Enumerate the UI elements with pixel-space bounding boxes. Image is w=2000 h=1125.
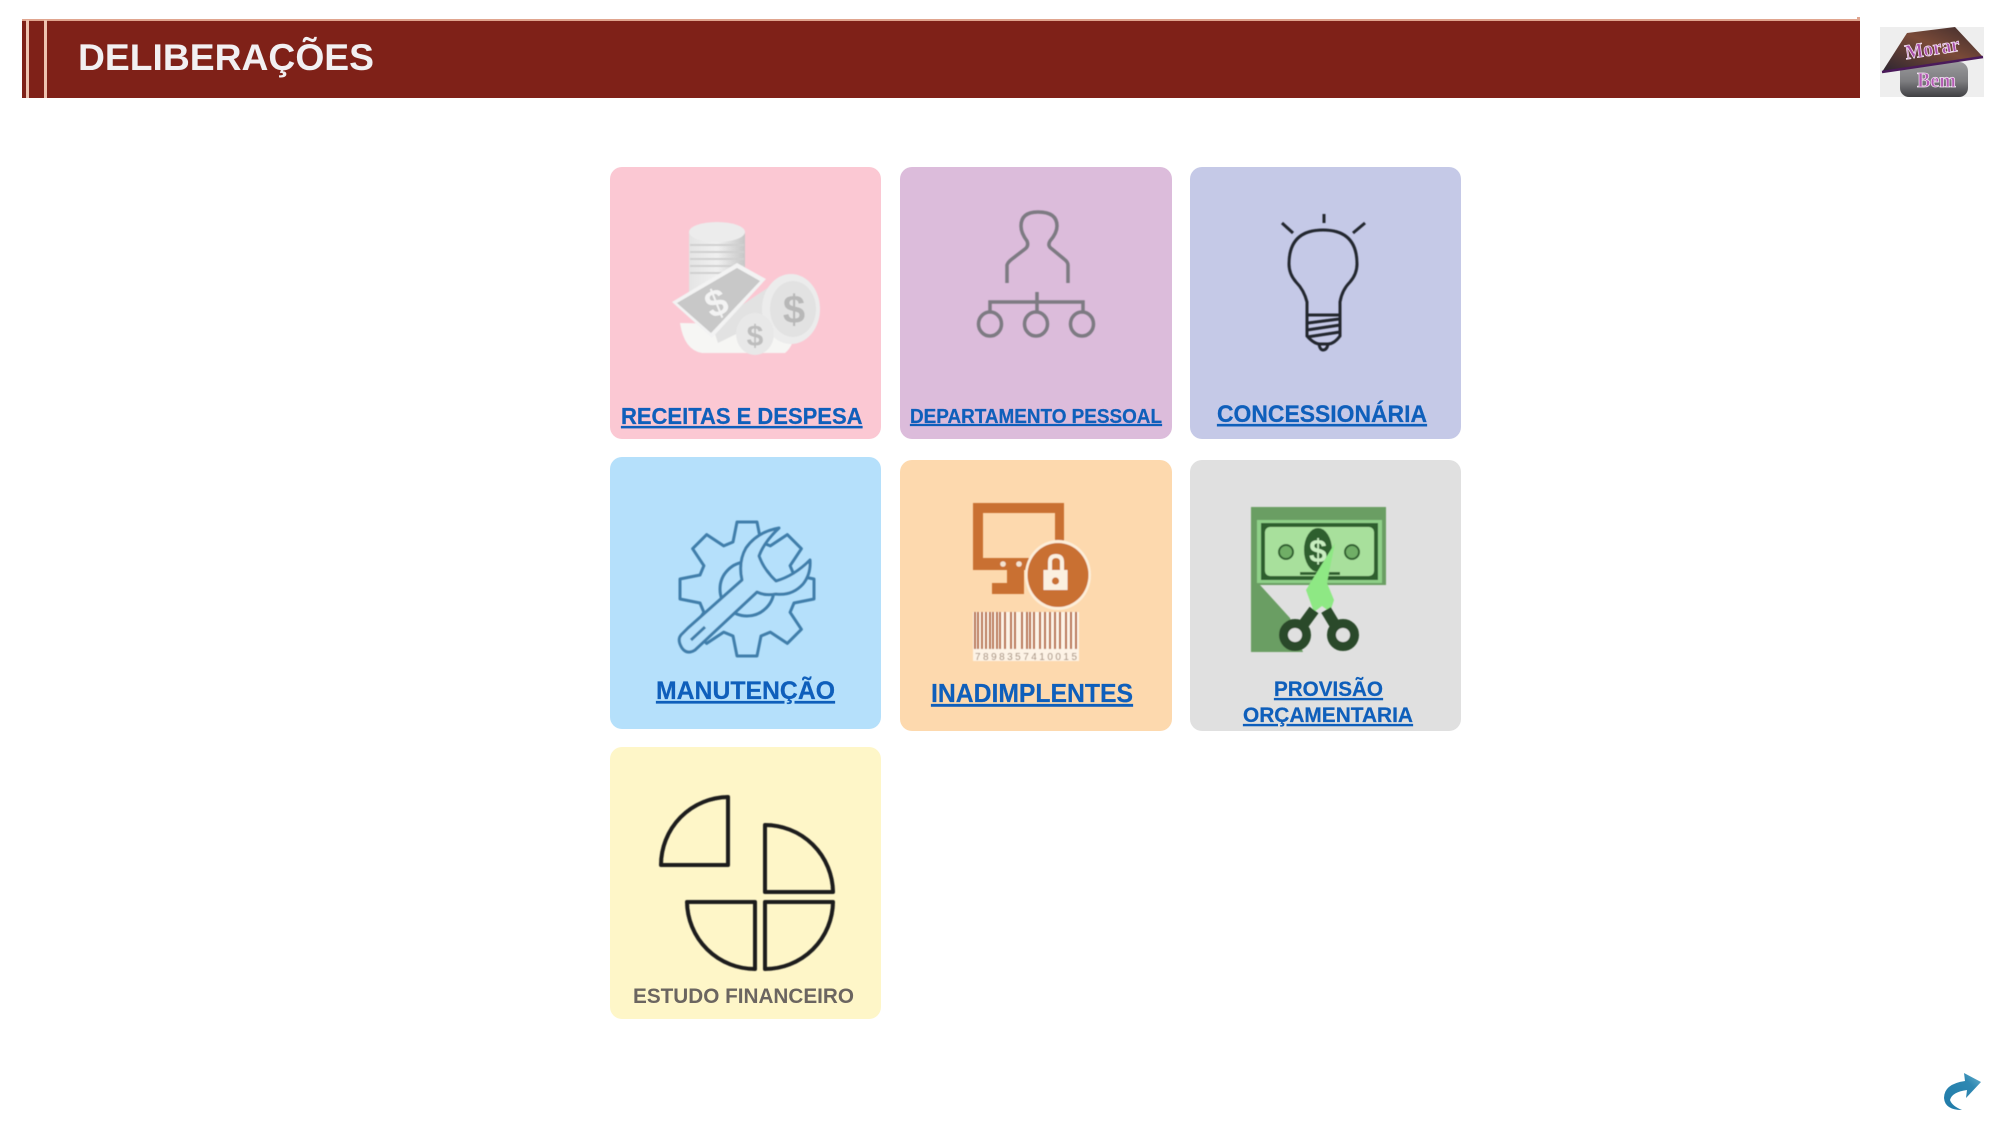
- header banner: [22, 17, 1860, 98]
- label: INADIMPLENTES: [931, 678, 1133, 708]
- label: MANUTENÇÃO: [656, 675, 835, 705]
- logo: Morar Bem: [1880, 27, 1984, 97]
- panel: inadimplentes: [900, 460, 1172, 731]
- panel: manutencao: [610, 457, 881, 729]
- label: ESTUDO FINANCEIRO: [633, 985, 854, 1008]
- panel: receitas e despesa: [610, 167, 881, 439]
- icon: banknote and scissors: $: [1309, 533, 1327, 569]
- icon: split pie: [661, 797, 833, 969]
- icon: return arrow: [1944, 1073, 1981, 1110]
- panel: departamento pessoal: [900, 167, 1172, 439]
- icon: monitor, lock and barcode: 7898357410015: [975, 652, 1077, 663]
- label: PROVISÃO: [1274, 678, 1383, 701]
- title: DELIBERAÇÕES: [78, 36, 374, 78]
- logo: Morar Bem: Bem: [1917, 68, 1956, 92]
- icon: coins and banknotes: $: [783, 288, 805, 332]
- icon: org chart: [978, 212, 1094, 336]
- panel: estudo financeiro: [610, 747, 881, 1019]
- label: DEPARTAMENTO PESSOAL: [910, 406, 1162, 428]
- icon: coins and banknotes: $: [747, 320, 764, 353]
- icon: coins and banknotes: $: [699, 280, 734, 327]
- icon: coins and banknotes: [672, 222, 820, 355]
- label: CONCESSIONÁRIA: [1217, 400, 1427, 428]
- icon: gear and wrench: [679, 522, 814, 656]
- label: RECEITAS E DESPESA: [621, 403, 862, 429]
- icon: banknote and scissors: [1251, 507, 1386, 652]
- label: ORÇAMENTARIA: [1243, 704, 1413, 727]
- icon: light bulb: [1282, 214, 1365, 350]
- label: [1243, 678, 1413, 727]
- icon: monitor, lock and barcode: [973, 503, 1091, 663]
- panel: concessionaria: [1190, 167, 1461, 439]
- panel: provisao orcamentaria: [1190, 460, 1461, 731]
- logo: Morar Bem: Morar: [1903, 32, 1961, 64]
